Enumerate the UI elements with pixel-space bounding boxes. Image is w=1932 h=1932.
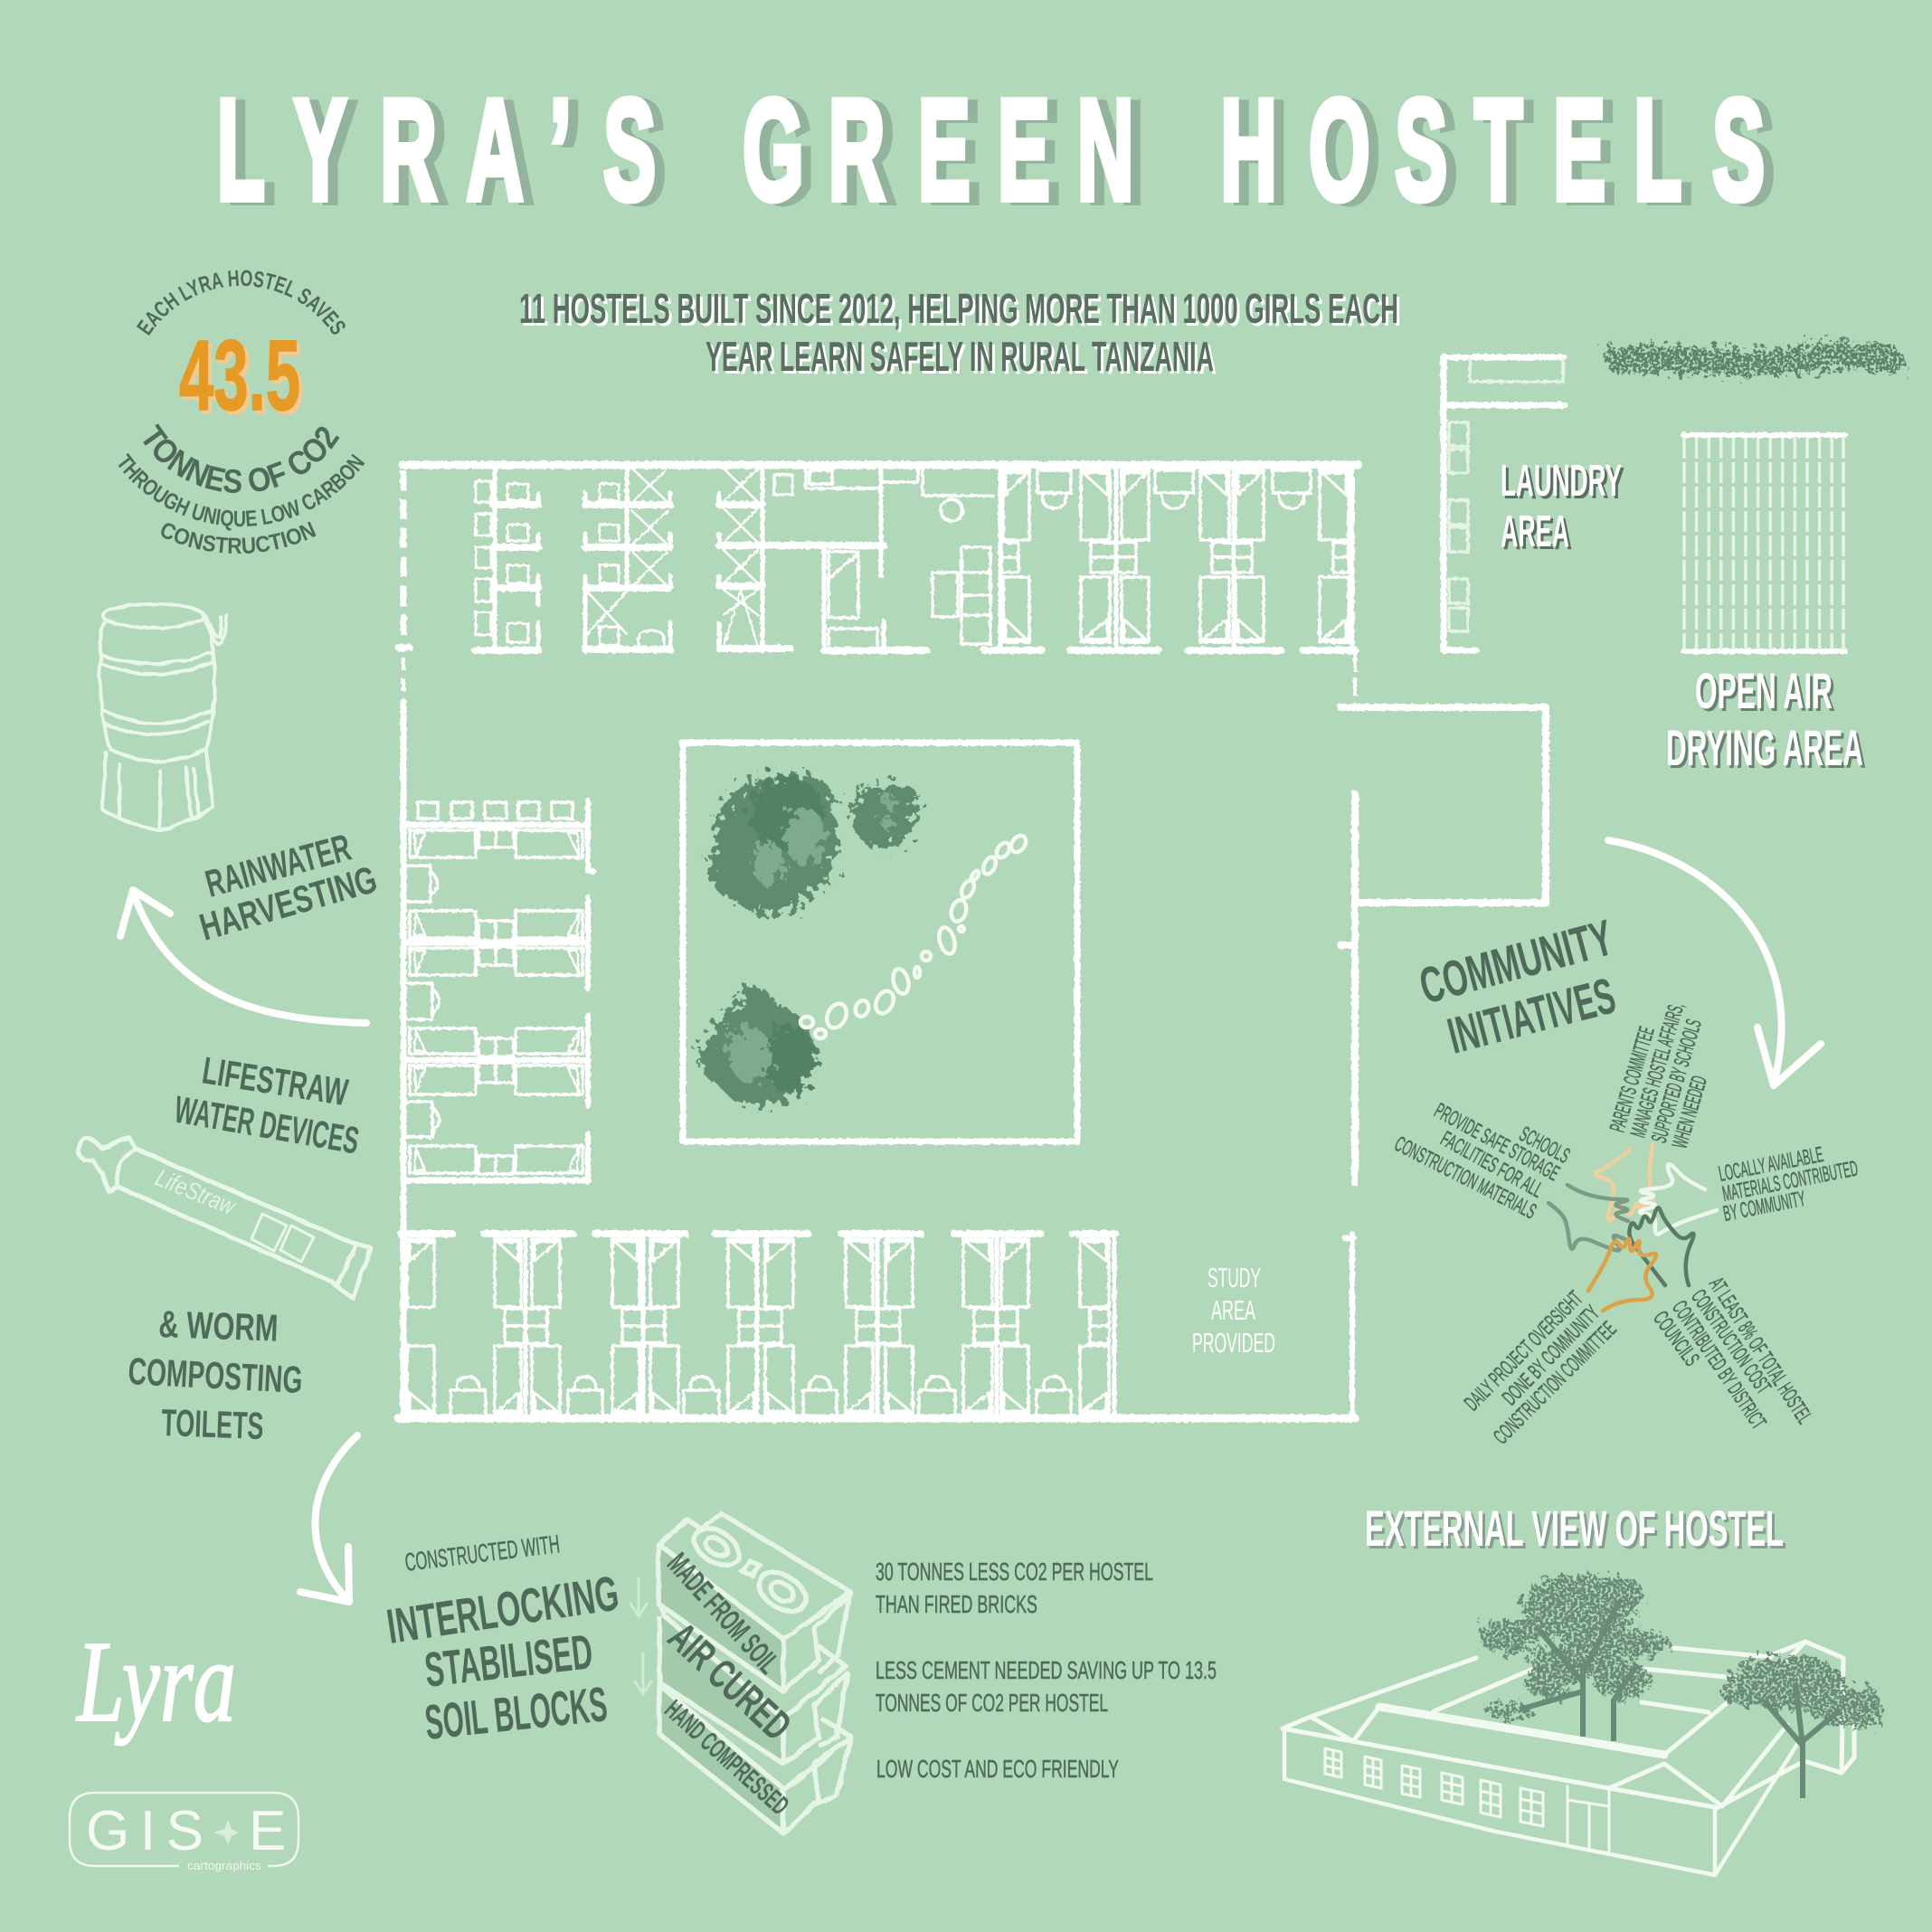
community initiatives heading: COMMUNITY (1414, 908, 1619, 1015)
community text: local materials: BY COMMUNITY (1721, 1187, 1807, 1226)
label: rainwater harvesting: HARVESTING (195, 857, 382, 949)
windows (1325, 1748, 1543, 1826)
community text: parents committee: WHEN NEEDED (1668, 1073, 1712, 1151)
block benefits text: TONNES OF CO2 PER HOSTEL (876, 1689, 1108, 1717)
label: interlocking stabilised soil blocks: SOIL BLOCKS (422, 1677, 610, 1750)
drying area racks (1683, 435, 1845, 651)
community initiatives heading (1414, 908, 1621, 1065)
tree: courtyard upper (710, 773, 838, 913)
icon: soil block stack (658, 1513, 851, 1833)
community text: district councils (1648, 1274, 1816, 1434)
community text: local materials (1717, 1142, 1860, 1226)
arrow: to community initiatives (1608, 840, 1821, 1085)
block benefits text: LESS CEMENT NEEDED SAVING UP TO 13.5 (876, 1656, 1217, 1684)
community text: parents committee (1605, 999, 1712, 1151)
badge construction text: THROUGH UNIQUE LOW CARBON (118, 452, 365, 530)
label: rainwater harvesting: RAINWATER (201, 826, 355, 905)
label: worm composting toilets: & WORM (158, 1302, 279, 1350)
external view of hostel (1283, 1575, 1880, 1875)
block label: air cured: AIR CURED (659, 1613, 800, 1749)
arrow: to soil blocks (300, 1435, 357, 1602)
label: open air drying area: OPEN AIR (1695, 662, 1833, 719)
tree: courtyard small (852, 782, 919, 849)
label: lifestraw water devices: WATER DEVICES (171, 1088, 362, 1162)
community text: local materials: LOCALLY AVAILABLE (1717, 1142, 1825, 1187)
subtitle: YEAR LEARN SAFELY IN RURAL TANZANIA (708, 336, 1217, 383)
block benefits text (876, 1558, 1217, 1783)
badge number: 43.5 (179, 320, 300, 431)
block benefits text: 30 TONNES LESS CO2 PER HOSTEL (876, 1558, 1153, 1586)
study area label: STUDY (1208, 1262, 1261, 1293)
outer walls (398, 465, 1546, 1420)
stepping stones path (800, 833, 1028, 1038)
logo: gise cartographics: E (249, 1800, 286, 1862)
community text: daily oversight (1460, 1286, 1622, 1449)
logo: gise cartographics: cartographics (187, 1859, 262, 1872)
logo: gise cartographics (70, 1793, 298, 1872)
study area label (1192, 1262, 1275, 1359)
community text: schools: FACILITIES FOR ALL (1436, 1127, 1548, 1203)
logo: lyra: Lyra (76, 1617, 236, 1746)
hedge (1619, 355, 1890, 363)
bottom wing: dormitory rooms (401, 1234, 1115, 1418)
tree: courtyard lower (698, 986, 816, 1106)
block benefits text: THAN FIRED BRICKS (876, 1590, 1037, 1618)
badge top arc text: EACH LYRA HOSTEL SAVES (136, 270, 346, 336)
label: worm composting toilets (128, 1302, 304, 1447)
title: LYRA’S GREEN HOSTELS (217, 71, 1765, 231)
top wing: washrooms and dormitory (475, 465, 1355, 651)
text: MANAGES HOSTEL AFFAIRS, (1626, 999, 1689, 1141)
community text: parents committee: PARENTS COMMITTEE (1605, 1024, 1660, 1135)
label: worm composting toilets: TOILETS (161, 1401, 264, 1447)
community text: schools: PROVIDE SAFE STORAGE (1430, 1099, 1563, 1186)
icon: rainwater barrel (99, 604, 226, 831)
floor plan (398, 465, 1546, 1420)
subtitle (519, 285, 1401, 383)
label: laundry area: LAUNDRY (1503, 459, 1624, 508)
community text: daily oversight: CONSTRUCTION COMMITTEE (1489, 1317, 1622, 1449)
study area label: PROVIDED (1192, 1327, 1275, 1359)
community text: daily oversight: DONE BY COMMUNITY (1498, 1301, 1605, 1410)
icon: lifestraw device (79, 1137, 371, 1298)
label: laundry area: AREA (1501, 507, 1569, 556)
community text: district councils: COUNCILS (1648, 1307, 1704, 1371)
block label: hand compressed: HAND COMPRESSED (658, 1695, 794, 1821)
tree: large central (1478, 1575, 1672, 1741)
community text: schools: SCHOOLS (1515, 1122, 1574, 1169)
community text: parents committee: SUPPORTED BY SCHOOLS (1647, 1017, 1707, 1146)
label: laundry area: AREA (1503, 510, 1572, 559)
laundry room plan (1444, 357, 1565, 650)
label: interlocking stabilised soil blocks: INTERLOCKING (384, 1566, 622, 1654)
label: lifestraw water devices (171, 1048, 362, 1162)
icon: lifestraw device: LifeStraw (152, 1164, 240, 1220)
badge number: 43.5 (183, 324, 304, 435)
building outline (1283, 1642, 1854, 1875)
block label: made from soil: MADE FROM SOIL (660, 1547, 786, 1681)
community text: schools (1390, 1099, 1574, 1224)
badge tonnes text: TONNES OF CO2 (143, 423, 340, 494)
study area label: AREA (1211, 1294, 1255, 1326)
tree: right side (1720, 1655, 1880, 1798)
left wing: dormitory rooms (403, 800, 593, 1182)
block benefits text: LOW COST AND ECO FRIENDLY (876, 1755, 1119, 1783)
label: constructed with: CONSTRUCTED WITH (403, 1530, 561, 1577)
community text: schools: CONSTRUCTION MATERIALS (1390, 1132, 1540, 1224)
courtyard wall (683, 743, 1077, 1141)
arrow: to rainwater harvesting (120, 890, 366, 1023)
label: interlocking stabilised soil blocks: STABILISED (422, 1624, 595, 1698)
subtitle: YEAR LEARN SAFELY IN RURAL TANZANIA (706, 333, 1214, 380)
icon: small down arrows (630, 1578, 651, 1694)
community text: district councils: AT LEAST 8% OF TOTAL HOSTEL (1704, 1274, 1816, 1428)
label: interlocking stabilised soil blocks (384, 1566, 622, 1750)
label: laundry area: LAUNDRY (1501, 457, 1622, 506)
label: laundry area (1501, 457, 1624, 559)
CO2 savings badge (118, 270, 365, 554)
label: rainwater harvesting (195, 826, 382, 949)
community initiatives heading: INITIATIVES (1442, 967, 1621, 1065)
community text: daily oversight: DAILY PROJECT OVERSIGHT (1460, 1286, 1587, 1416)
label: open air drying area (1666, 662, 1866, 779)
label: worm composting toilets: COMPOSTING (128, 1350, 304, 1401)
title: LYRA’S GREEN HOSTELS (227, 74, 1775, 233)
label: lifestraw water devices: LIFESTRAW (200, 1048, 351, 1113)
badge number (179, 320, 304, 435)
icon: joined hands (1548, 1144, 1717, 1311)
badge construction text: CONSTRUCTION (161, 521, 317, 554)
community text: district councils: CONTRIBUTED BY DISTRICT (1667, 1296, 1771, 1434)
logo: gise cartographics: GIS (86, 1800, 204, 1862)
community text: district councils: CONSTRUCTION COST (1686, 1285, 1776, 1398)
